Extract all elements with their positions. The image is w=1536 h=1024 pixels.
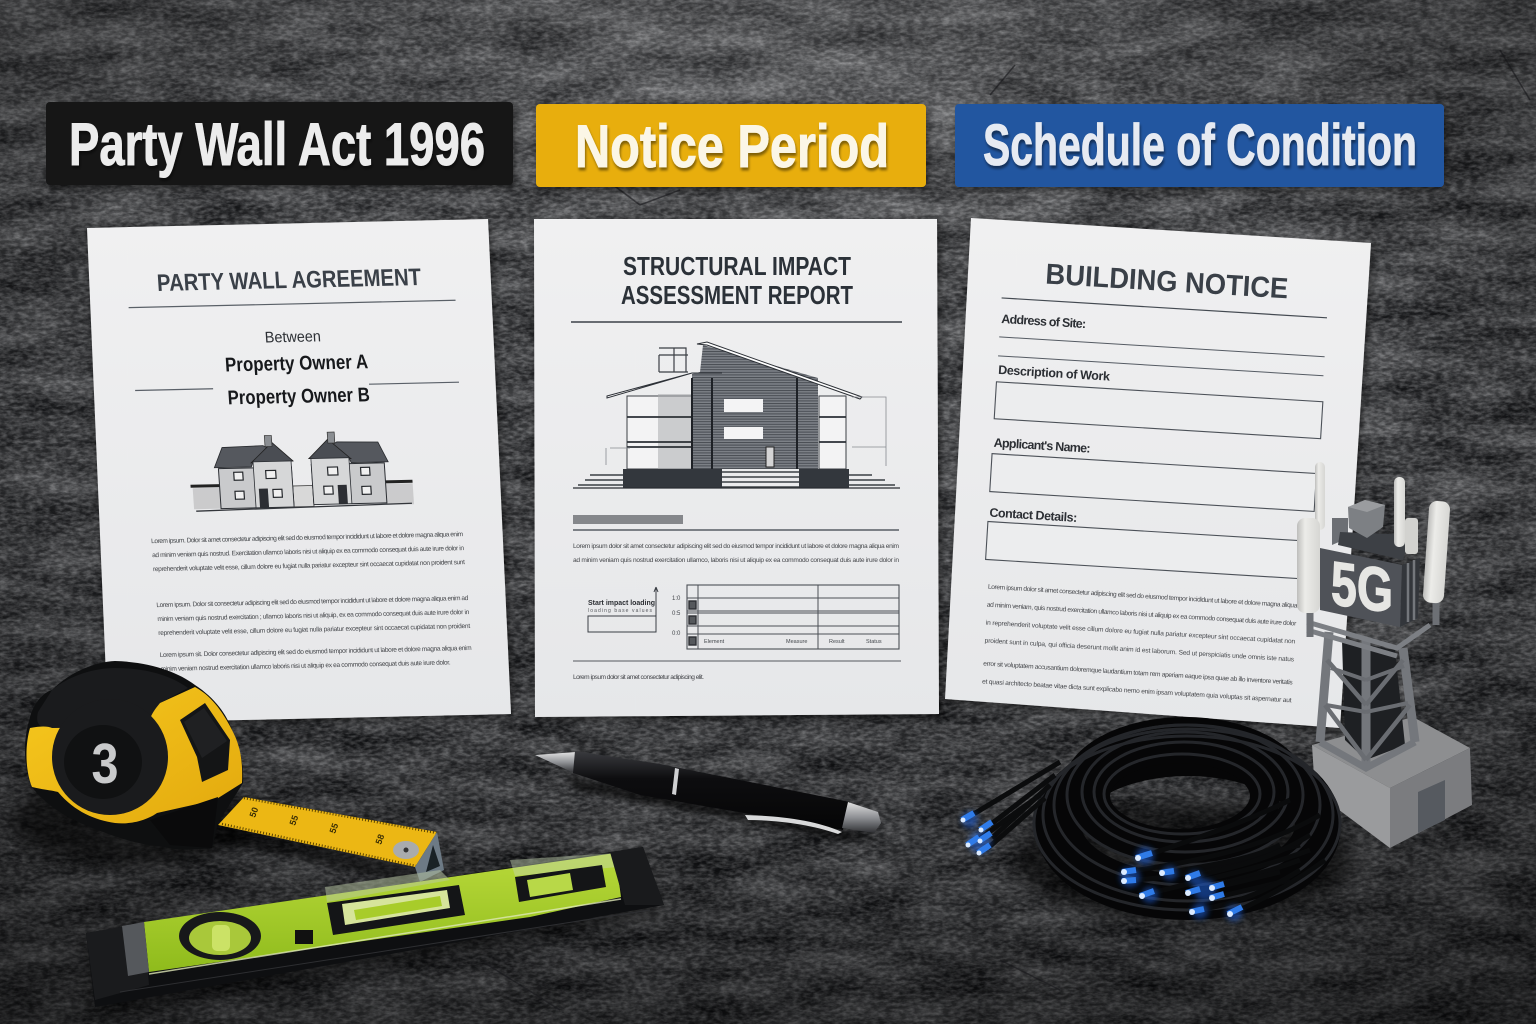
body text [151,531,473,673]
parties: Property Owner A [224,351,369,376]
tape size number: 3 [92,732,118,796]
notice body text: ad minim veniam, quis nostrud exercitation ullamco laboris nisi ut aliquip ex ea commodo consequat duis aute irure dolor [987,602,1297,628]
fibre tips [962,813,1242,914]
notice body text: in reprehenderit voluptate velit esse cillum dolore eu fugiat nulla pariatur excepteur sint occaecat cupidatat non [986,620,1296,646]
document title [621,251,853,310]
parties: Property Owner B [227,384,370,409]
document title: STRUCTURAL IMPACT [623,251,851,281]
parties [223,327,371,409]
field: address of site: Address of Site: [1001,312,1087,331]
cable ends left [972,762,1060,848]
fibre optic cable coil [960,725,1355,921]
document: Party Wall Agreement [87,219,511,723]
platform and panel [1307,500,1436,656]
tape blade [214,797,444,883]
field: contact details [986,506,1313,579]
illustration: building section [573,342,900,488]
mini chart: Start impact loading [588,598,655,607]
tape blade: 55 [287,814,300,827]
footnote: Lorem ipsum dolor sit amet consectetur adipiscing elit. [573,674,704,681]
notice body text: Lorem ipsum dolor sit amet consectetur adipiscing elit sed do eiusmod tempor incididunt ut labore et dolore magna aliqua [988,584,1298,610]
mini chart: 0:0 [672,631,681,637]
blue glow [962,812,1242,921]
vial: centre [327,885,465,935]
notice body text: proident sunt in culpa, qui officia deserunt mollit anim id est laborum. Sed ut perspiciatis unde omnis iste natus [984,638,1295,664]
body text: Lorem ipsum. Dolor sit amet consectetur adipiscing elit sed do eiusmod tempor incididunt ut labore et dolore magna aliqua enim [151,531,464,545]
illustration: semi-detached houses [187,430,414,511]
field: applicant's name [990,436,1318,511]
section heading bar [573,515,683,524]
label: Schedule of Condition [955,104,1444,187]
vial: round [179,912,261,960]
body text: ad minim veniam quis nostrud. Exercitation ullamco laboris nisi ut aliquip ex ea commodo consequat duis aute irure dolor in [152,545,465,559]
tape blade: 55 [327,822,340,835]
body text: reprehenderit voluptate velit esse, cillum dolore eu fugiat nulla pariatur excepteur sint occaecat cupidatat non proident [158,623,471,637]
data table: Element [704,639,725,645]
label: Notice Period [536,104,926,187]
tape casing [25,661,243,849]
document title: BUILDING NOTICE [1045,259,1289,305]
report body text: Lorem ipsum dolor sit amet consectetur adipiscing elit sed do eiusmod tempor incididunt ut labore et dolore magna aliqua enim [573,543,900,550]
tape blade: 50 [247,806,260,819]
notice body text [982,584,1298,704]
body text: minim veniam nostrud exercitation ullamco laboris nisi ut aliquip ex ea commodo consequat duis aute irure dolor. [160,659,451,673]
field: contact details: Contact Details: [989,506,1078,525]
body text: Lorem ipsum sit. Dolor consectetur adipiscing elit sed do eiusmod tempor incididunt ut labore et dolore magna aliqua enim [160,645,472,659]
field: description of work [994,363,1324,439]
antennas [1297,462,1451,613]
mini chart: 0:5 [672,611,681,617]
field: address of site [998,312,1326,376]
pen [535,751,881,840]
lattice tower [1320,632,1415,768]
data table: Status [866,639,882,645]
tape measure [10,661,444,883]
mini chart: 1:0 [672,596,681,602]
mini chart: loading base values [588,608,652,614]
notice body text: et quasi architecto beatae vitae dicta sunt explicabo nemo enim ipsam voluptatem quia voluptas sit aspernatur aut [982,678,1292,704]
spirit level [86,847,664,1014]
data table: Measure [786,639,807,645]
mini chart [588,587,681,637]
coil loops [1034,725,1340,910]
field: description of work: Description of Work [998,363,1110,384]
small square [295,930,313,944]
document: Structural Impact Assessment Report [534,219,939,717]
document title: PARTY WALL AGREEMENT [156,264,422,297]
telecom tower model [1297,462,1472,848]
concrete base [1312,717,1472,848]
body text: minim veniam quis nostrud exercitation ; ullamco laboris nisi ut aliquip, ex ea commodo consequat duis aute irure dolor in [157,609,470,623]
label: Party Wall Act 1996: Party Wall Act 1996 [69,111,485,178]
tape blade: 58 [373,833,386,846]
parties: Between [264,328,321,347]
body text: reprehenderit voluptate velit esse, cillum dolore eu fugiat nulla pariatur excepteur sint occaecat cupidatat non proident sunt [153,559,465,573]
label: Notice Period: Notice Period [575,113,889,180]
notice body text: error sit voluptatem accusantium doloremque laudantium totam rem aperiam eaque ipsa quae ab illo inventore veritatis [983,661,1294,686]
vial: right [515,865,606,902]
data table: Result [829,639,845,645]
report body text [573,543,900,564]
field: applicant's name: Applicant's Name: [993,436,1091,456]
document: Building Notice [945,218,1371,728]
body text: Lorem ipsum. Dolor sit consectetur adipiscing elit sed do eiusmod tempor incididunt ut labore et dolore magna aliqua enim ad [156,595,469,609]
cable ends front [1133,800,1325,910]
label: Party Wall Act 1996 [46,102,513,185]
data table [687,585,899,649]
5G label: 5G [1331,549,1393,627]
report body text: ad minim veniam quis nostrud exercitation ullamco, laboris nisi ut aliquip ex ea commodo consequat duis aute irure dolor in [573,557,899,564]
document title: ASSESSMENT REPORT [621,280,853,310]
